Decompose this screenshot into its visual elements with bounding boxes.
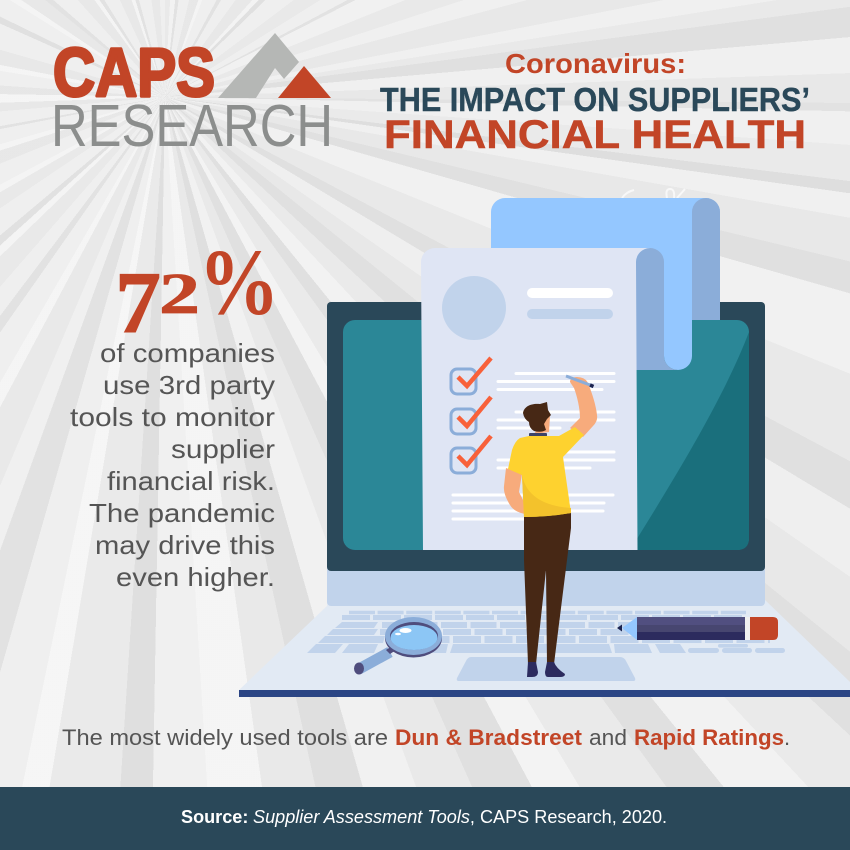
magnifying glass: [354, 617, 442, 674]
statistic: 72 percent: 2: [159, 261, 200, 326]
footer source text: Source:: [181, 807, 248, 827]
text block: statistic description: tools to monitor: [70, 402, 275, 432]
text block: statistic description: supplier: [171, 434, 275, 464]
checkbox 1: [451, 358, 491, 394]
pencil tip: [622, 617, 637, 640]
document text lines: [453, 374, 614, 519]
footer source text: Supplier Assessment Tools: [253, 807, 470, 827]
document heading bar: [527, 288, 613, 298]
back document: [491, 198, 720, 370]
text block: statistic description: The pandemic: [89, 498, 275, 528]
laptop screen frame: [327, 302, 765, 571]
document avatar circle: [442, 276, 506, 340]
illustration: laptop with checklist and person: [239, 189, 850, 697]
trackpad: [457, 657, 635, 681]
magnifier rim: [385, 618, 442, 658]
back document sheet: [491, 198, 720, 370]
pencil: [617, 617, 778, 640]
title: [380, 48, 810, 157]
text block: statistic description: [70, 338, 275, 592]
text block: statistic description: use 3rd party: [103, 370, 275, 400]
statistic: 72 percent: %: [198, 231, 280, 335]
footer band: [0, 787, 850, 850]
laptop lid lower panel: [327, 560, 765, 606]
person raised arm: [570, 377, 597, 437]
person shirt: [508, 427, 584, 517]
back document fold: [692, 198, 720, 320]
title line: financial health: FINANCIAL HEALTH: [384, 113, 806, 157]
person writing on document: [504, 376, 597, 677]
person lowered arm: [504, 468, 525, 514]
logo wordmark: CAPS: CAPS: [53, 34, 215, 111]
text line: most widely used tools: .: [784, 725, 790, 750]
pencil eraser: [750, 617, 778, 640]
person head: [523, 402, 551, 436]
logo wordmark: RESEARCH: RESEARCH: [51, 93, 333, 159]
text line: most widely used tools: Rapid Ratings: [634, 725, 784, 750]
person pen: [566, 376, 594, 386]
text block: statistic description: of companies: [100, 338, 275, 368]
person shoes: [527, 662, 565, 677]
pencil body: [637, 617, 745, 640]
text block: statistic description: may drive this: [95, 530, 275, 560]
front document sheet: [421, 248, 650, 550]
person trousers: [524, 513, 571, 664]
checkbox 3: [451, 436, 491, 473]
title line: Coronavirus: Coronavirus:: [505, 48, 686, 79]
statistic: 72 percent: 7: [115, 255, 161, 352]
front document: [421, 248, 678, 550]
title line: the impact on suppliers: THE IMPACT ON SUPPLIERS’: [380, 81, 810, 118]
footer source text: , CAPS Research, 2020.: [470, 807, 667, 827]
magnifier handle: [359, 652, 390, 669]
logo: CAPS Research: [51, 33, 333, 159]
logo mark: grey mountain: [218, 33, 299, 98]
keyboard: [307, 612, 785, 653]
text line: most widely used tools: and: [589, 725, 627, 750]
checkbox 2: [451, 397, 491, 434]
text line: most widely used tools: Dun & Bradstreet: [395, 725, 583, 750]
text block: statistic description: financial risk.: [107, 466, 275, 496]
text line: most widely used tools: The most widely used tools are: [62, 725, 388, 750]
logo mark: red peak: [278, 66, 331, 98]
laptop base: [239, 600, 850, 690]
magnifier lens: [390, 625, 438, 650]
text block: statistic description: even higher.: [116, 562, 275, 592]
front document fold: [636, 248, 678, 370]
laptop screen shadow: [630, 332, 749, 550]
statistic: 72 percent: [115, 231, 280, 352]
laptop front edge: [239, 690, 850, 697]
document subheading bar: [527, 309, 613, 319]
laptop screen: [343, 320, 749, 550]
